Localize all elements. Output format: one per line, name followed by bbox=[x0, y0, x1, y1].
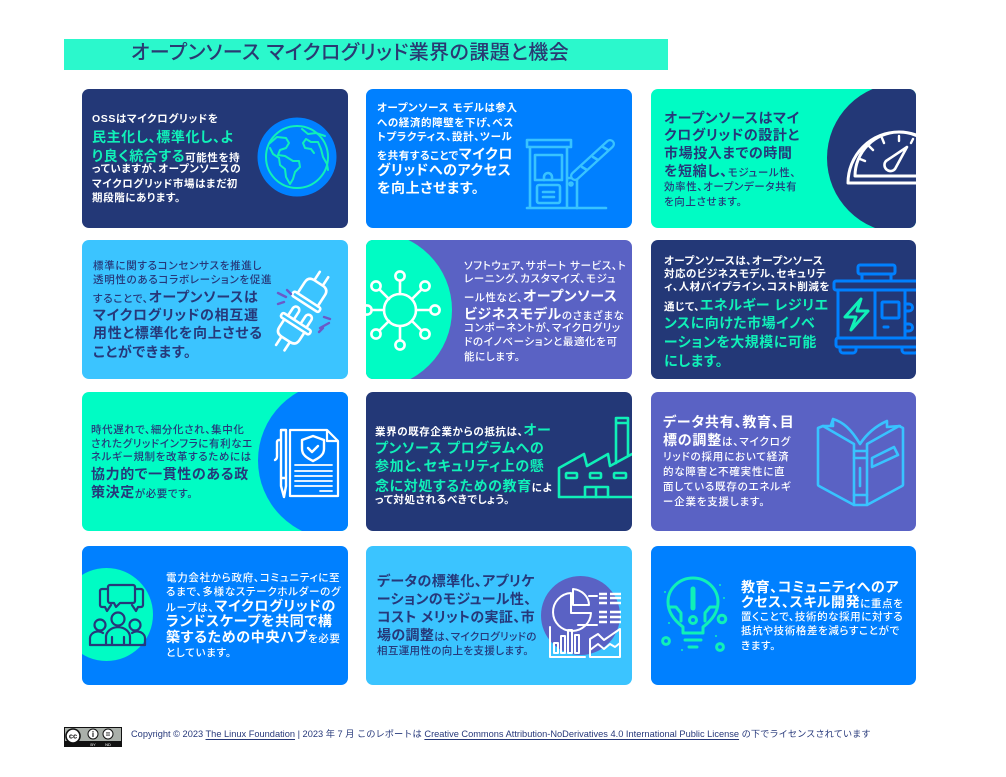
lower plug bbox=[266, 302, 318, 357]
text block: 教育、コミュニティへのア bbox=[741, 579, 899, 595]
text block bbox=[377, 102, 518, 196]
panel: democratise bbox=[82, 89, 348, 228]
text block: ドのイノベーションと最適化を可 bbox=[464, 336, 618, 348]
title bar bbox=[64, 39, 668, 70]
text block: ィ、人材パイプライン、コスト削減を bbox=[664, 281, 830, 293]
icon: network hub bbox=[366, 270, 441, 351]
upper plug bbox=[292, 266, 337, 313]
icon: plugs bbox=[274, 270, 332, 352]
text block: 場の調整は、マイクログリッドの bbox=[377, 627, 537, 643]
text block: を短縮し、モジュール性、 bbox=[664, 163, 796, 179]
text block: 透明性のあるコラボレーションを促進 bbox=[93, 274, 272, 286]
text block: ランドスケープを共同で構 bbox=[166, 613, 333, 629]
text block: オープンソース モデルは参入 bbox=[377, 102, 518, 114]
panel: business models bbox=[366, 240, 632, 379]
panel: incumbents bbox=[366, 392, 632, 531]
text block: オープンソースは、オープンソース bbox=[664, 255, 823, 267]
text block: るまで、多様なステークホルダーのグ bbox=[166, 586, 341, 598]
icon: gauge bbox=[846, 130, 916, 184]
text block: データ共有、教育、目 bbox=[663, 414, 795, 430]
text block: ネルギー規制を改革するためには bbox=[91, 451, 252, 463]
panel: standardisation bbox=[366, 546, 632, 685]
text block: されたグリッドインフラに有利なエ bbox=[91, 438, 253, 450]
icon: factory bbox=[558, 416, 632, 498]
panel: consensus bbox=[82, 240, 348, 379]
icon: charts bbox=[549, 588, 621, 658]
text block: 念に対処するための教育によ bbox=[375, 478, 552, 494]
panel: policy bbox=[82, 392, 348, 531]
title: オープンソース マイクログリッド業界の課題と機会 bbox=[131, 42, 569, 64]
icon: toll gate bbox=[526, 138, 615, 210]
text block: 面している既存のエネルギ bbox=[663, 481, 792, 493]
text block: グリッドへのアクセス bbox=[377, 162, 511, 178]
text block: データの標準化、アプリケ bbox=[377, 573, 535, 589]
text block: 的な障害と不確実性に直 bbox=[663, 466, 785, 478]
accent circle bbox=[296, 232, 452, 388]
text block: ことができます。 bbox=[93, 344, 192, 360]
text block: ビジネスモデルのさまざまな bbox=[464, 306, 624, 322]
text block: OSSはマイクログリッドを bbox=[92, 113, 218, 125]
text block: ーションを大規模に可能 bbox=[664, 334, 817, 350]
text block bbox=[92, 112, 241, 204]
text block: 築するための中央ハブを必要 bbox=[166, 629, 341, 645]
text block: ンスに向けた市場イノベ bbox=[664, 315, 815, 331]
license badge: cc bbox=[69, 732, 77, 740]
text block: マイクログリッドの相互運 bbox=[93, 307, 259, 323]
text block: 電力会社から政府、コミュニティに至 bbox=[166, 572, 340, 584]
text block: 市場投入までの時間 bbox=[664, 145, 793, 161]
text block: 能にします。 bbox=[464, 351, 520, 363]
text block: 効率性、オープンデータ共有 bbox=[664, 181, 797, 193]
text block: にします。 bbox=[664, 353, 723, 369]
text block: 通じて、エネルギー レジリエ bbox=[664, 297, 829, 313]
text block: ソフトウェア、サポート サービス、ト bbox=[464, 260, 626, 272]
text block bbox=[375, 422, 552, 506]
text block: トプラクティス、設計、ツール bbox=[377, 131, 512, 143]
text block: への経済的障壁を下げ、ベス bbox=[377, 117, 514, 129]
license badge bbox=[64, 727, 122, 747]
text block: コスト メリットの実証、市 bbox=[377, 609, 535, 625]
text block: を向上させます。 bbox=[377, 180, 479, 196]
text block bbox=[93, 260, 272, 360]
icon: open book bbox=[816, 418, 904, 506]
text block: としています。 bbox=[166, 647, 232, 659]
text block: ループは、マイクログリッドの bbox=[166, 598, 336, 614]
panel: access bbox=[366, 89, 632, 228]
text block bbox=[741, 579, 903, 652]
text block: クセス、スキル開発に重点を bbox=[741, 594, 903, 610]
text block: コンポーネントが、マイクログリッ bbox=[464, 322, 621, 334]
text block bbox=[664, 110, 800, 208]
panel: stakeholders bbox=[82, 546, 348, 685]
accent circle bbox=[258, 382, 415, 539]
panel: education bbox=[651, 546, 916, 685]
footer text: Copyright © 2023 The Linux Foundation | 2023 年 7 月 このレポートは Creative Commons Attribution-NoDerivatives 4.0 International Public License の下でライセンスされています bbox=[131, 729, 871, 739]
text block: 協力的で一貫性のある政 bbox=[91, 466, 249, 482]
text block: オープンソースはマイ bbox=[664, 110, 800, 126]
text block: 時代遅れで、細分化され、集中化 bbox=[91, 424, 244, 436]
license badge: BY bbox=[90, 742, 96, 747]
text block: 民主化し、標準化し、よ bbox=[92, 129, 234, 145]
text block: っていますが、オープンソースの bbox=[92, 163, 241, 175]
text block: ー企業を支援します。 bbox=[663, 496, 765, 508]
accent circle bbox=[827, 83, 977, 233]
icon: secure document bbox=[274, 428, 340, 498]
text block: マイクログリッド市場はまだ初 bbox=[92, 178, 238, 190]
icon: community group bbox=[88, 584, 146, 646]
text block: 用性と標準化を向上させる bbox=[93, 325, 263, 341]
text block: することで、オープンソースは bbox=[93, 289, 259, 305]
text block: 策決定が必要です。 bbox=[91, 484, 193, 500]
accent circle bbox=[60, 568, 153, 661]
text block bbox=[663, 414, 795, 508]
icon: lightbulb bbox=[661, 576, 728, 652]
icon: generator bbox=[832, 264, 916, 354]
text block: り良く統合する可能性を持 bbox=[92, 148, 240, 164]
text block: レーニング、カスタマイズ、モジュ bbox=[464, 273, 616, 285]
text block bbox=[91, 424, 253, 500]
accent circle bbox=[541, 576, 620, 655]
text block bbox=[377, 573, 537, 657]
license badge: ND bbox=[105, 742, 111, 747]
text block: 参加と、セキュリティ上の懸 bbox=[375, 458, 544, 474]
icon: globe bbox=[258, 118, 336, 196]
spark marks bbox=[278, 290, 330, 332]
text block: って対処されるべきでしょう。 bbox=[375, 494, 510, 506]
text block: ール性など、オープンソース bbox=[464, 288, 618, 304]
text block: きます。 bbox=[741, 640, 776, 652]
text block: リッドの採用において経済 bbox=[663, 451, 789, 463]
license badge: = bbox=[106, 730, 111, 739]
text block: 業界の既存企業からの抵抗は、オー bbox=[375, 422, 551, 438]
panel: time to market bbox=[651, 89, 916, 228]
text block: 対応のビジネスモデル、セキュリテ bbox=[664, 268, 826, 280]
text block bbox=[166, 572, 341, 659]
text block: 期段階にあります。 bbox=[92, 192, 181, 204]
text block: を向上させます。 bbox=[664, 196, 742, 208]
panel: energy resilience bbox=[651, 240, 916, 379]
license badge: i bbox=[92, 730, 94, 739]
text block: 置くことで、技術的な採用に対する bbox=[741, 611, 903, 623]
text block: プンソース プログラムへの bbox=[375, 440, 544, 456]
text block: クログリッドの設計と bbox=[664, 127, 800, 143]
text block: 相互運用性の向上を支援します。 bbox=[377, 645, 529, 657]
panel: data sharing bbox=[651, 392, 916, 531]
text block bbox=[664, 255, 830, 369]
text block: を共有することでマイクロ bbox=[377, 146, 513, 162]
text block: ーションのモジュール性、 bbox=[377, 591, 532, 607]
text block: 抵抗や技術格差を減らすことがで bbox=[741, 625, 900, 637]
text block: 標の調整は、マイクログ bbox=[663, 432, 791, 448]
text block bbox=[464, 260, 626, 363]
text block: 標準に関するコンセンサスを推進し bbox=[93, 260, 262, 272]
